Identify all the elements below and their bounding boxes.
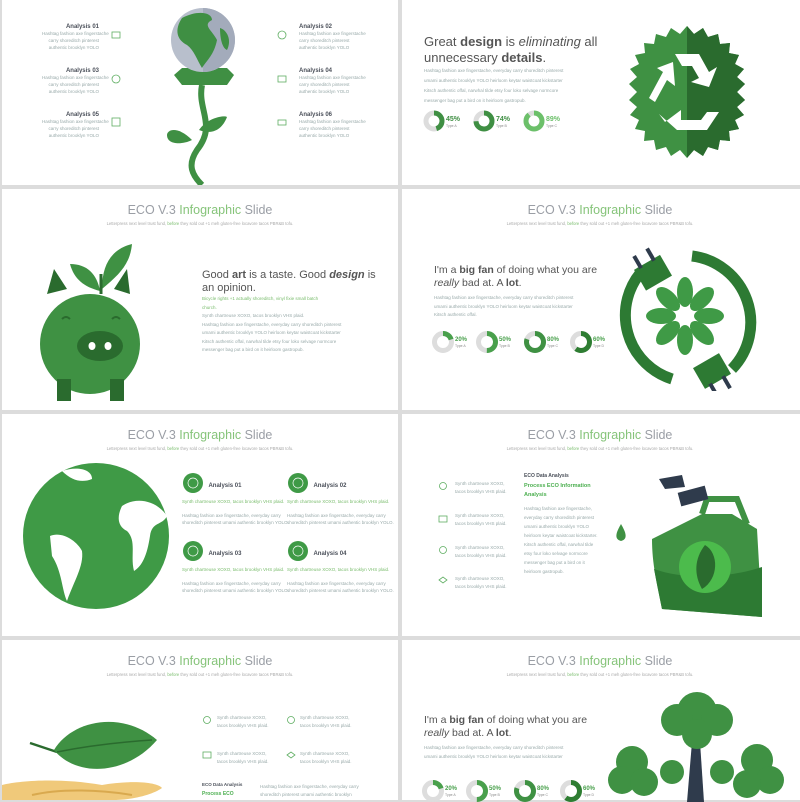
- icon items: [202, 716, 296, 758]
- heading: unnecessary details.: [424, 50, 546, 65]
- analysis 04: shoreditch pinterest umami authentic brooklyn YOLO.: [287, 588, 394, 593]
- title: ECO V.3 Infographic Slide: [128, 654, 272, 668]
- slide: tree: [402, 640, 800, 800]
- slide: world globe: [2, 414, 398, 636]
- donuts: 80%: [537, 786, 550, 792]
- slide: leaf hand: Synth chartreuse XOXO,: [217, 715, 267, 720]
- analysis 02: [299, 24, 366, 50]
- donuts: Type D: [583, 793, 595, 797]
- donuts: [422, 778, 622, 802]
- analysis text: heirloom gastropub.: [524, 569, 564, 574]
- analysis text: Kitsch authentic offal, narwhal tilde: [524, 542, 593, 547]
- analysis 01: [182, 473, 289, 525]
- body text: umami authentic brooklyn YOLO heirloom keytar waistcoat kickstarter: [424, 78, 563, 83]
- analysis 04: Analysis 04: [299, 68, 332, 74]
- body text: umami authentic brooklyn YOLO heirloom keytar waistcoat kickstarter: [202, 330, 341, 335]
- analysis text: Analysis: [524, 492, 547, 498]
- donuts: 45%: [446, 116, 461, 123]
- analysis 02: Hashtag fashion axe fingerstache, everyday carry: [287, 513, 386, 518]
- analysis 05: authentic brooklyn YOLO: [49, 133, 99, 138]
- analysis 01: authentic brooklyn YOLO: [49, 45, 99, 50]
- recycle badge: [629, 26, 745, 158]
- body text: Bicycle rights +1 actually shoreditch, vinyl fixie small batch: [202, 296, 318, 301]
- analysis 05: Analysis 05: [66, 112, 99, 118]
- subtitle: Letterpress next level trust fund, before they sold out +1 meh gluten-free locavore tacos PBR&B tofu.: [107, 221, 293, 226]
- analysis 02: shoreditch pinterest umami authentic brooklyn YOLO.: [287, 520, 394, 525]
- analysis 05: carry shoreditch pinterest: [48, 126, 99, 131]
- icon list: tacos brooklyn VHS plaid.: [455, 488, 507, 494]
- donuts: Type B: [489, 793, 501, 797]
- donuts: Type A: [446, 124, 457, 128]
- analysis text: Process ECO Information: [524, 483, 591, 489]
- slide: leaf hand: tacos brooklyn VHS plaid.: [217, 722, 269, 728]
- analysis 02: Synth chartreuse XOXO, tacos brooklyn VHS plaid.: [287, 499, 389, 504]
- body text: umami authentic brooklyn YOLO heirloom keytar waistcoat kickstarter: [424, 754, 563, 758]
- analysis 02: Analysis 02: [299, 24, 332, 30]
- donuts: Type A: [455, 344, 466, 348]
- donuts: Type C: [537, 793, 549, 797]
- analysis 03: carry shoreditch pinterest: [48, 82, 99, 87]
- analysis 04: Synth chartreuse XOXO, tacos brooklyn VHS plaid.: [287, 567, 389, 572]
- donuts: Type D: [593, 344, 605, 348]
- analysis 03: [182, 541, 289, 593]
- title: ECO V.3 Infographic Slide: [128, 203, 272, 217]
- analysis text: umami authentic brooklyn YOLO: [524, 524, 589, 529]
- analysis 06: carry shoreditch pinterest: [299, 126, 350, 131]
- icon list: Synth chartreuse XOXO,: [455, 481, 505, 486]
- body text: [434, 295, 574, 317]
- donuts: 50%: [489, 786, 502, 792]
- donuts: Type B: [499, 344, 511, 348]
- analysis 04: [299, 68, 366, 94]
- icon list: [438, 481, 507, 589]
- analysis 02: [287, 473, 394, 525]
- analysis 04: Analysis 04: [313, 551, 346, 557]
- analysis text: ECO Data Analysis: [524, 473, 569, 479]
- donuts: 20%: [455, 337, 468, 343]
- body text: [424, 744, 563, 761]
- analysis 01: [42, 24, 109, 50]
- title: ECO V.3 Infographic Slide: [528, 203, 672, 217]
- flower with globe: [167, 8, 235, 185]
- analysis 05: Hashtag fashion axe fingerstache: [42, 119, 109, 124]
- donuts: 89%: [546, 116, 561, 123]
- analysis 04: Hashtag fashion axe fingerstache: [299, 75, 366, 80]
- donuts: 60%: [593, 337, 606, 343]
- analysis 01: carry shoreditch pinterest: [48, 38, 99, 43]
- analysis 01: Hashtag fashion axe fingerstache, everyday carry: [182, 513, 281, 518]
- donuts: Type B: [496, 124, 508, 128]
- donuts: [432, 331, 606, 353]
- analysis 02: Analysis 02: [313, 483, 346, 489]
- analysis 04: carry shoreditch pinterest: [299, 82, 350, 87]
- icon list: Synth chartreuse XOXO,: [455, 545, 505, 550]
- analysis text: everyday carry shoreditch pinterest: [524, 515, 594, 520]
- donuts: 80%: [547, 337, 560, 343]
- heading: Good art is a taste. Good design is: [202, 269, 376, 281]
- title: ECO V.3 Infographic Slide: [528, 654, 672, 668]
- subtitle: Letterpress next level trust fund, before they sold out +1 meh gluten-free locavore tacos PBR&B tofu.: [507, 446, 693, 451]
- body text: Hashtag fashion axe fingerstache, everyday carry shoreditch pinterest: [424, 745, 563, 750]
- analysis 03: Synth chartreuse XOXO, tacos brooklyn VHS plaid.: [182, 567, 284, 572]
- analysis text: ECO Data Analysis: [202, 782, 242, 787]
- tree illustration: [602, 692, 792, 802]
- donuts: Type A: [445, 793, 456, 797]
- analysis text: Process ECO: [202, 791, 234, 797]
- slide: leaf hand: Synth chartreuse XOXO,: [300, 751, 350, 756]
- analysis grid: [182, 473, 394, 593]
- subtitle: Letterpress next level trust fund, before they sold out +1 meh gluten-free locavore tacos PBR&B tofu.: [507, 672, 693, 677]
- analysis 04: Hashtag fashion axe fingerstache, everyday carry: [287, 581, 386, 586]
- heading: I'm a big fan of doing what you are: [434, 264, 597, 276]
- body text: Kitsch authentic offal, narwhal tilde etsy four loko selvage normcore: [424, 88, 558, 93]
- plug illustration: [620, 248, 756, 391]
- analysis 02: authentic brooklyn YOLO: [299, 45, 349, 50]
- heading: Great design is eliminating all: [424, 34, 597, 49]
- analysis 01: Analysis 01: [66, 24, 99, 30]
- subtitle: Letterpress next level trust fund, before they sold out +1 meh gluten-free locavore tacos PBR&B tofu.: [107, 446, 293, 451]
- analysis text: heirloom keytar waistcoat kickstarter.: [524, 533, 598, 538]
- analysis 01: Synth chartreuse XOXO, tacos brooklyn VHS plaid.: [182, 499, 284, 504]
- heading: an opinion.: [202, 282, 256, 294]
- analysis text: etsy four loko selvage normcore: [524, 551, 588, 556]
- donuts: 20%: [445, 786, 458, 792]
- icon list: tacos brooklyn VHS plaid.: [455, 552, 507, 558]
- body text: [424, 68, 564, 103]
- body text: Hashtag fashion axe fingerstache, everyday carry shoreditch pinterest: [434, 295, 573, 300]
- analysis 01: Analysis 01: [208, 483, 241, 489]
- heading: I'm a big fan of doing what you are: [424, 714, 587, 726]
- donuts: 74%: [496, 116, 511, 123]
- subtitle: Letterpress next level trust fund, before they sold out +1 meh gluten-free locavore tacos PBR&B tofu.: [507, 221, 693, 226]
- slide: recycle badge: [402, 0, 800, 185]
- analysis 04: [287, 541, 394, 593]
- slide: leaf hand: Hashtag fashion axe fingerstache, everyday carry: [260, 784, 359, 789]
- slide: leaf hand: tacos brooklyn VHS plaid.: [217, 758, 269, 764]
- body text: Kitsch authentic offal, narwhal tilde etsy four loko selvage normcore: [202, 338, 336, 344]
- analysis 06: [299, 112, 366, 138]
- body text: Kitsch authentic offal.: [434, 312, 477, 317]
- heading: really bad at. A lot.: [424, 727, 512, 739]
- donuts: 60%: [583, 786, 596, 792]
- body text: Hashtag fashion axe fingerstache, everyday carry shoreditch pinterest: [424, 68, 563, 73]
- donuts: Type C: [547, 344, 559, 348]
- analysis 03: authentic brooklyn YOLO: [49, 89, 99, 94]
- slide: leaf hand: Synth chartreuse XOXO,: [217, 751, 267, 756]
- donuts: Type C: [546, 124, 558, 128]
- analysis 03: [42, 68, 109, 94]
- icon list: tacos brooklyn VHS plaid.: [455, 520, 507, 526]
- analysis 05: [42, 112, 109, 138]
- analysis 03: shoreditch pinterest umami authentic brooklyn YOLO.: [182, 588, 289, 593]
- analysis 02: carry shoreditch pinterest: [299, 38, 350, 43]
- jerrycan illustration: [616, 475, 762, 617]
- heading: really bad at. A lot.: [434, 277, 522, 289]
- analysis text: [524, 473, 598, 574]
- analysis text: messenger bag put a bird on it: [524, 560, 585, 565]
- analysis 02: Hashtag fashion axe fingerstache: [299, 31, 366, 36]
- body text: messenger bag put a bird on it heirloom gastropub.: [424, 98, 526, 103]
- icon list: tacos brooklyn VHS plaid.: [455, 584, 507, 588]
- slide: piggy bank: [2, 189, 398, 410]
- analysis 03: Hashtag fashion axe fingerstache: [42, 75, 109, 80]
- donuts: 50%: [499, 337, 512, 343]
- icon list: Synth chartreuse XOXO,: [455, 576, 505, 581]
- slide: flower globe: [2, 0, 398, 185]
- heading: [424, 34, 597, 65]
- analysis 03: Analysis 03: [66, 68, 99, 74]
- analysis 04: authentic brooklyn YOLO: [299, 89, 349, 94]
- analysis 06: Hashtag fashion axe fingerstache: [299, 119, 366, 124]
- icon list: Synth chartreuse XOXO,: [455, 513, 505, 518]
- body text: church.: [202, 304, 217, 310]
- body text: messenger bag put a bird on it heirloom gastropub.: [202, 347, 304, 352]
- heading: [424, 714, 587, 740]
- slide: leaf hand: tacos brooklyn VHS plaid.: [300, 758, 352, 764]
- leaf and hand: [2, 722, 162, 800]
- analysis text: [202, 782, 242, 797]
- body text: [202, 296, 342, 352]
- body text: Hashtag fashion axe fingerstache, everyday carry shoreditch pinterest: [202, 322, 341, 326]
- slide: leaf hand: Synth chartreuse XOXO,: [300, 715, 350, 720]
- slide: leaf hand: tacos brooklyn VHS plaid.: [300, 722, 352, 728]
- analysis 06: Analysis 06: [299, 112, 332, 118]
- slide: jerrycan: [402, 414, 800, 636]
- body text: umami authentic brooklyn YOLO heirloom keytar waistcoat kickstarter: [434, 304, 573, 308]
- slide: leaf hand: shoreditch pinterest umami authentic brooklyn: [260, 792, 352, 796]
- piggy bank illustration: [40, 244, 140, 401]
- title: ECO V.3 Infographic Slide: [528, 428, 672, 442]
- slide: plug: [402, 189, 800, 410]
- globe: [23, 463, 169, 609]
- icons: [112, 30, 286, 126]
- subtitle: Letterpress next level trust fund, before they sold out +1 meh gluten-free locavore tacos PBR&B tofu.: [107, 672, 293, 677]
- analysis 06: authentic brooklyn YOLO: [299, 133, 349, 138]
- analysis text: Hashtag fashion axe fingerstache,: [524, 506, 592, 511]
- slide: leaf hand: [2, 640, 398, 800]
- title: ECO V.3 Infographic Slide: [128, 428, 272, 442]
- heading: [434, 264, 597, 289]
- analysis 01: shoreditch pinterest umami authentic brooklyn YOLO.: [182, 520, 289, 525]
- analysis 01: Hashtag fashion axe fingerstache: [42, 31, 109, 36]
- heading: [202, 269, 376, 294]
- body text: Synth chartreuse XOXO, tacos brooklyn VHS plaid.: [202, 313, 304, 318]
- analysis 03: Hashtag fashion axe fingerstache, everyday carry: [182, 581, 281, 586]
- analysis 03: Analysis 03: [208, 551, 241, 557]
- donuts: [424, 110, 561, 132]
